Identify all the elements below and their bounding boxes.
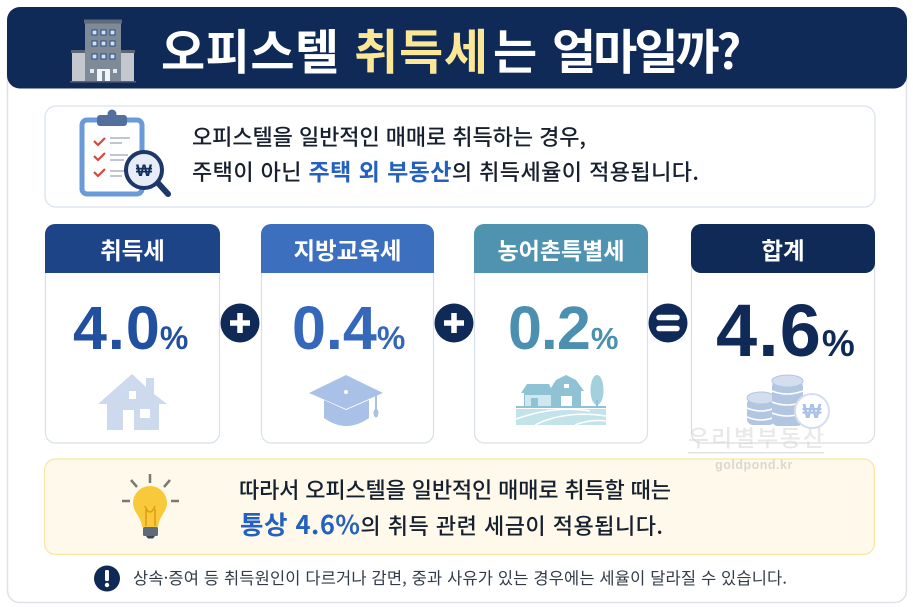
intro text: 주택이 아닌 주택 외 부동산의 취득세율이 적용됩니다. [192, 153, 699, 187]
icon: exclamation [94, 566, 120, 592]
card: 지방교육세: 0.4% [292, 294, 405, 362]
conclusion text: 통상 4.6%의 취득 관련 세금이 적용됩니다. [240, 505, 663, 542]
icon: light bulb [122, 474, 179, 538]
icon: house [98, 374, 167, 430]
card: 농어촌특별세 [474, 224, 648, 443]
icon: coins [747, 375, 829, 428]
conclusion text [239, 473, 671, 542]
card: 합계: 4.6% [716, 289, 856, 372]
watermark: 우리별부동산 [688, 419, 824, 453]
card: 농어촌특별세: 농어촌특별세 [498, 232, 624, 266]
title: 얼마일까? [552, 13, 740, 83]
card: 취득세: 4.0% [73, 294, 189, 362]
watermark: goldpond.kr [715, 458, 793, 472]
icon: farm [516, 375, 606, 425]
card: 취득세 [45, 224, 220, 443]
header banner [7, 7, 907, 88]
operator: equals [648, 304, 688, 342]
footnote: 상속·증여 등 취득원인이 다르거나 감면, 중과 사유가 있는 경우에는 세율이 달라질 수 있습니다. [133, 565, 787, 589]
icon: clipboard with magnifier: ₩ [136, 161, 153, 180]
icon: coins: ₩ [803, 401, 822, 423]
title: 취득세 [354, 13, 489, 83]
icon: office building [70, 20, 136, 82]
card: 지방교육세: 지방교육세 [293, 232, 402, 266]
panel: intro [45, 106, 875, 207]
operator: plus [434, 304, 474, 342]
card: 지방교육세 [261, 224, 434, 443]
operator: plus [220, 304, 260, 342]
icon: graduation cap [309, 375, 383, 426]
panel: conclusion [44, 459, 874, 554]
title: 는 [493, 13, 537, 83]
icon: clipboard with magnifier [82, 110, 168, 194]
card: 농어촌특별세: 0.2% [508, 294, 618, 362]
card: 합계 [691, 224, 875, 443]
conclusion text: 따라서 오피스텔을 일반적인 매매로 취득할 때는 [239, 473, 671, 505]
card: 취득세: 취득세 [100, 232, 165, 266]
title: 오피스텔 [161, 13, 340, 83]
watermark [688, 419, 824, 472]
intro text [192, 120, 699, 187]
intro text: 오피스텔을 일반적인 매매로 취득하는 경우, [192, 120, 586, 152]
card: 합계: 합계 [761, 232, 805, 266]
